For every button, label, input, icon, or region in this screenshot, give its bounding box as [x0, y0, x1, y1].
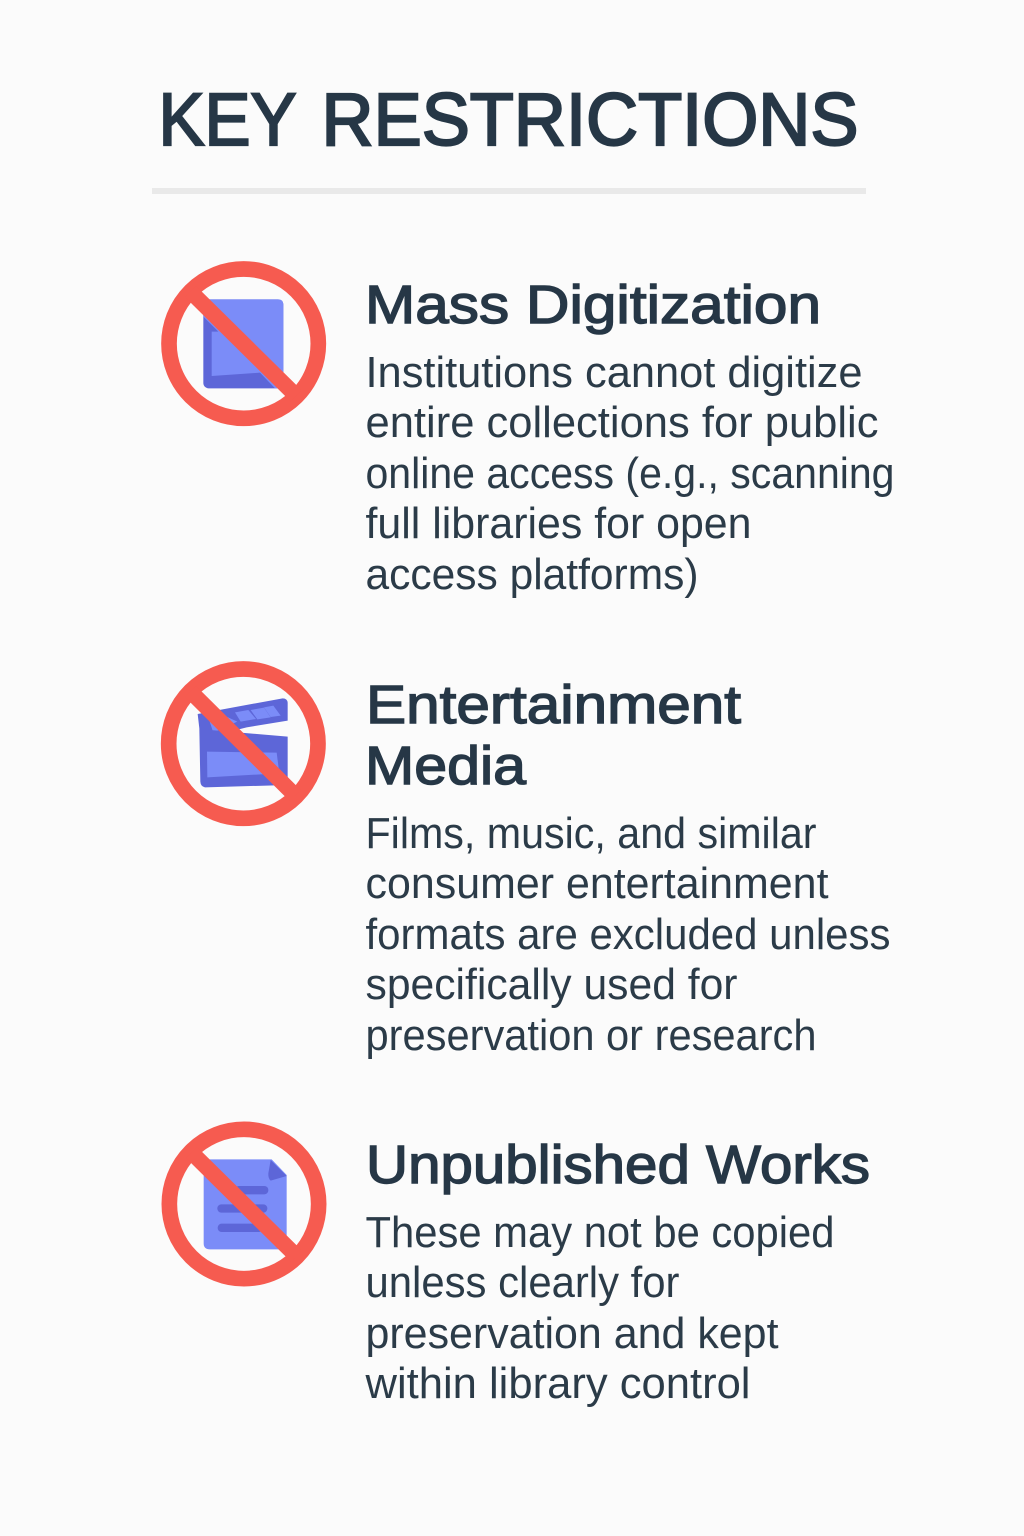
- panel: entertainment media: [169, 669, 890, 1060]
- heading: Mass Digitization: [365, 275, 821, 335]
- body text: These may not be copied: [366, 1208, 834, 1257]
- body text: specifically used for: [366, 960, 738, 1009]
- body text: full libraries for open: [366, 499, 752, 548]
- body text: [366, 348, 894, 599]
- heading: Media: [365, 736, 527, 796]
- heading: Entertainment: [366, 675, 741, 735]
- heading: Unpublished Works: [366, 1135, 870, 1195]
- panel: unpublished works: [169, 1129, 870, 1408]
- title: RESTRICTIONS: [322, 78, 858, 161]
- body text: [366, 809, 890, 1060]
- body text: preservation or research: [366, 1011, 816, 1060]
- body text: preservation and kept: [366, 1309, 778, 1358]
- body text: consumer entertainment: [366, 859, 828, 908]
- body text: [365, 1208, 834, 1408]
- heading: [365, 675, 741, 796]
- body text: online access (e.g., scanning: [366, 449, 894, 498]
- body text: formats are excluded unless: [366, 910, 890, 959]
- body text: within library control: [365, 1359, 750, 1408]
- body text: Institutions cannot digitize: [366, 348, 862, 397]
- title: KEY: [158, 78, 296, 161]
- body text: entire collections for public: [366, 398, 878, 447]
- icon: prohibited book: [169, 269, 318, 418]
- panel: mass digitization: [169, 269, 894, 599]
- body text: Films, music, and similar: [366, 809, 816, 858]
- icon: prohibited document: [169, 1129, 319, 1279]
- body text: access platforms): [366, 550, 698, 599]
- body text: unless clearly for: [366, 1258, 680, 1307]
- icon: prohibited clapperboard: [169, 669, 318, 818]
